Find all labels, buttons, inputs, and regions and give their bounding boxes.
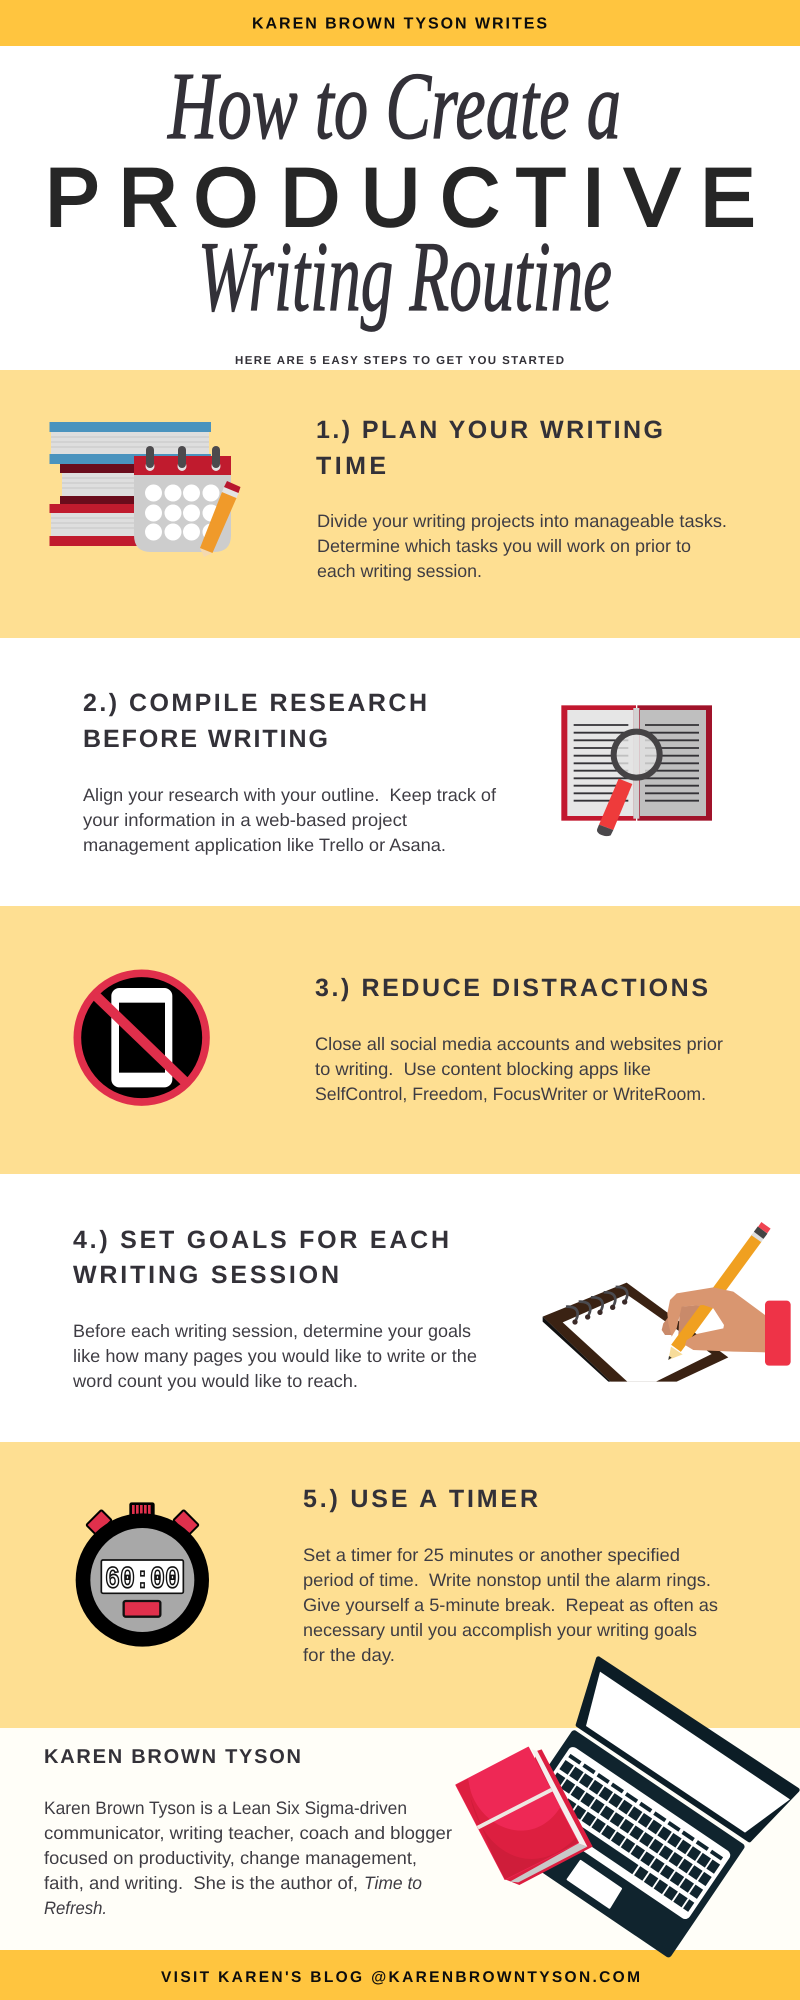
- body text: management application like Trello or Asana.: [83, 835, 446, 855]
- panel: step 1 plan your writing time: [0, 370, 800, 638]
- icon: books and calendar: [50, 422, 240, 557]
- top banner: KAREN BROWN TYSON WRITES: [252, 16, 547, 32]
- heading: TIME: [316, 452, 386, 480]
- body text: [72, 1321, 477, 1391]
- icon: hand writing in notebook: [543, 1225, 791, 1382]
- footer banner: VISIT KAREN'S BLOG @KARENBROWNTYSON.COM: [161, 1969, 640, 1986]
- author bio text: Time to: [364, 1873, 422, 1893]
- body text: [315, 1034, 723, 1104]
- title: [45, 52, 755, 332]
- panel: step 2 compile research: [0, 638, 800, 906]
- body text: necessary until you accomplish your writing goals: [303, 1620, 697, 1640]
- author bio text: Karen Brown Tyson is a Lean Six Sigma-driven: [44, 1798, 407, 1818]
- icon: open book with magnifier: [561, 705, 712, 836]
- heading: BEFORE WRITING: [83, 725, 328, 753]
- heading: [73, 1226, 449, 1289]
- icon: no phone: [77, 973, 206, 1102]
- illustration: laptop and red book: [450, 1659, 797, 1959]
- body text: [83, 785, 497, 855]
- laptop: [497, 1659, 797, 1959]
- author bio text: Refresh.: [44, 1898, 107, 1918]
- panel: step 3 reduce distractions: [0, 906, 800, 1174]
- author bio text: faith, and writing. She is the author of,: [44, 1873, 358, 1893]
- heading: WRITING SESSION: [73, 1261, 339, 1289]
- body text: Divide your writing projects into manageable tasks.: [317, 511, 727, 531]
- author bio text: communicator, writing teacher, coach and blogger: [44, 1823, 452, 1843]
- heading: [83, 689, 427, 753]
- title: PRODUCTIVE: [45, 152, 755, 244]
- body text: Determine which tasks you will work on prior to: [317, 536, 691, 556]
- body text: [303, 1545, 718, 1665]
- heading: 3.) REDUCE DISTRACTIONS: [315, 974, 708, 1002]
- red book: [450, 1747, 593, 1887]
- body text: word count you would like to reach.: [72, 1371, 358, 1391]
- panel: step 5 use a timer: [0, 1442, 800, 1728]
- body text: for the day.: [303, 1645, 395, 1665]
- body text: period of time. Write nonstop until the alarm rings.: [303, 1570, 711, 1590]
- author name: KAREN BROWN TYSON: [44, 1746, 301, 1768]
- body text: each writing session.: [317, 561, 482, 581]
- body text: [317, 511, 727, 581]
- author bio text: [44, 1798, 452, 1918]
- heading: [316, 416, 663, 480]
- panel: step 4 set goals: [0, 1174, 800, 1442]
- icon: stopwatch: 60:00: [105, 1562, 180, 1597]
- body text: Align your research with your outline. Keep track of: [83, 785, 497, 805]
- body text: to writing. Use content blocking apps like: [315, 1059, 651, 1079]
- heading: 1.) PLAN YOUR WRITING: [316, 416, 663, 444]
- body text: SelfControl, Freedom, FocusWriter or WriteRoom.: [315, 1084, 706, 1104]
- body text: Give yourself a 5-minute break. Repeat as often as: [303, 1595, 718, 1615]
- body text: Set a timer for 25 minutes or another specified: [303, 1545, 680, 1565]
- body text: Before each writing session, determine your goals: [73, 1321, 471, 1341]
- heading: 2.) COMPILE RESEARCH: [83, 689, 427, 717]
- panel: author bio: [0, 1728, 800, 1950]
- icon: stopwatch: [76, 1502, 209, 1647]
- footer banner: [0, 1950, 800, 2000]
- body text: Close all social media accounts and websites prior: [315, 1034, 723, 1054]
- title: How to Create a: [167, 52, 621, 159]
- heading: 4.) SET GOALS FOR EACH: [73, 1226, 449, 1254]
- top banner: [0, 0, 800, 46]
- subtitle: HERE ARE 5 EASY STEPS TO GET YOU STARTED: [235, 355, 564, 367]
- body text: like how many pages you would like to write or the: [73, 1346, 477, 1366]
- heading: 5.) USE A TIMER: [303, 1485, 538, 1513]
- body text: your information in a web-based project: [83, 810, 407, 830]
- author bio text: focused on productivity, change management,: [44, 1848, 417, 1868]
